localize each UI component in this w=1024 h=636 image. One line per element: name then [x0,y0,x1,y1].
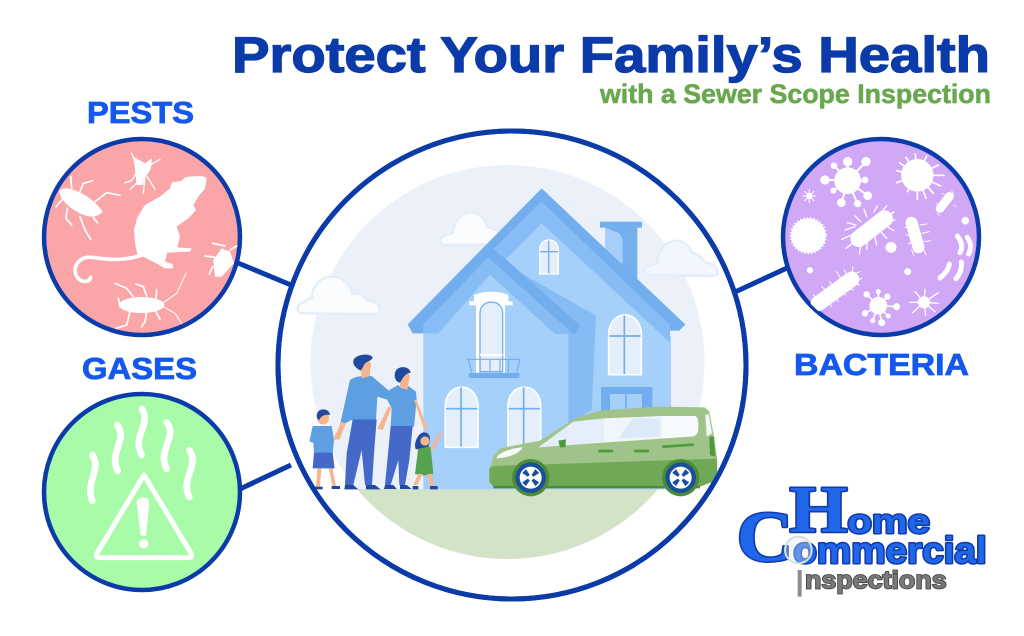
logo: Home and Commercial: ommercial [793,529,987,571]
icon: roach upper left [59,188,103,217]
icon: roach bottom [119,297,164,313]
mother [387,385,417,427]
main wall [423,223,671,489]
van lower body [489,459,717,487]
microbes [791,154,971,325]
logo: Home and Commercial: H [789,474,848,547]
panel: pests [44,139,240,335]
sky disc [310,165,704,559]
panel: gases [44,394,240,590]
subtitle: with a Sewer Scope Inspection [599,79,991,109]
girl [415,446,433,475]
balcony [467,359,520,373]
pest silhouettes [56,153,237,328]
bacteria disc [783,139,979,335]
lawn [358,489,658,559]
connector: bacteria to centre [735,268,787,292]
cloud left [298,277,380,314]
title: Protect Your Family’s Health [232,27,990,83]
van body [489,407,717,487]
panel: bacteria [783,139,979,335]
van details [497,447,523,458]
icon: round cell [791,218,826,253]
icon: fly right [213,248,234,277]
chimney [605,225,637,285]
arched balcony window [474,292,508,373]
logo: Home and Commercial: ome [847,503,930,541]
icon: spark bottom [918,296,930,308]
roof dark band [408,188,685,334]
icon: fumes [90,409,193,501]
green van [489,407,717,496]
icon: virus top left [821,158,871,206]
dots [886,242,896,253]
boy [309,426,334,453]
right upper window [609,315,641,375]
icon: small star [803,189,816,203]
logo: Home and Commercial: C [737,497,793,577]
cloud middle [440,213,500,245]
lower window left [445,387,478,447]
family [309,355,442,489]
centre ring overlay [278,131,746,599]
front wheel [512,459,549,496]
icon: warning triangle [96,475,192,558]
heading: gases: GASES [82,351,197,386]
logo: magnifier [785,537,812,563]
centre ring [278,131,746,599]
icon: spiky coccus [897,154,944,199]
icon: small bacillus top right [936,192,954,213]
logo [737,474,987,597]
van windows [538,418,603,447]
attic window [540,240,558,274]
father [341,376,390,423]
right door frame [601,387,652,424]
logo: inspections: nspections [805,567,947,594]
heading: pests: PESTS [87,95,194,130]
heading: bacteria: BACTERIA [794,347,969,382]
lower window middle [508,387,541,447]
pests disc [44,139,240,335]
gases disc [44,394,240,590]
logo: Home and Commercial [737,474,987,577]
icon: virus bottom [863,290,899,325]
lower roof inner [423,257,572,334]
main roof inner [494,202,670,343]
icon: fly top [133,157,152,185]
right shadow wall [507,265,596,423]
icon: long bacillus bottom [810,272,860,312]
panel: centre family home [278,131,746,599]
connector: gases to centre [240,465,291,489]
house illustration [298,188,718,496]
icon: large bacillus [850,210,893,247]
rear wheel [662,459,699,496]
connector: pests to centre [238,263,291,285]
icon: middle bacillus [906,216,924,254]
icon: rat [75,176,207,281]
cloud right [644,241,718,276]
icon: curved rods [940,236,971,279]
